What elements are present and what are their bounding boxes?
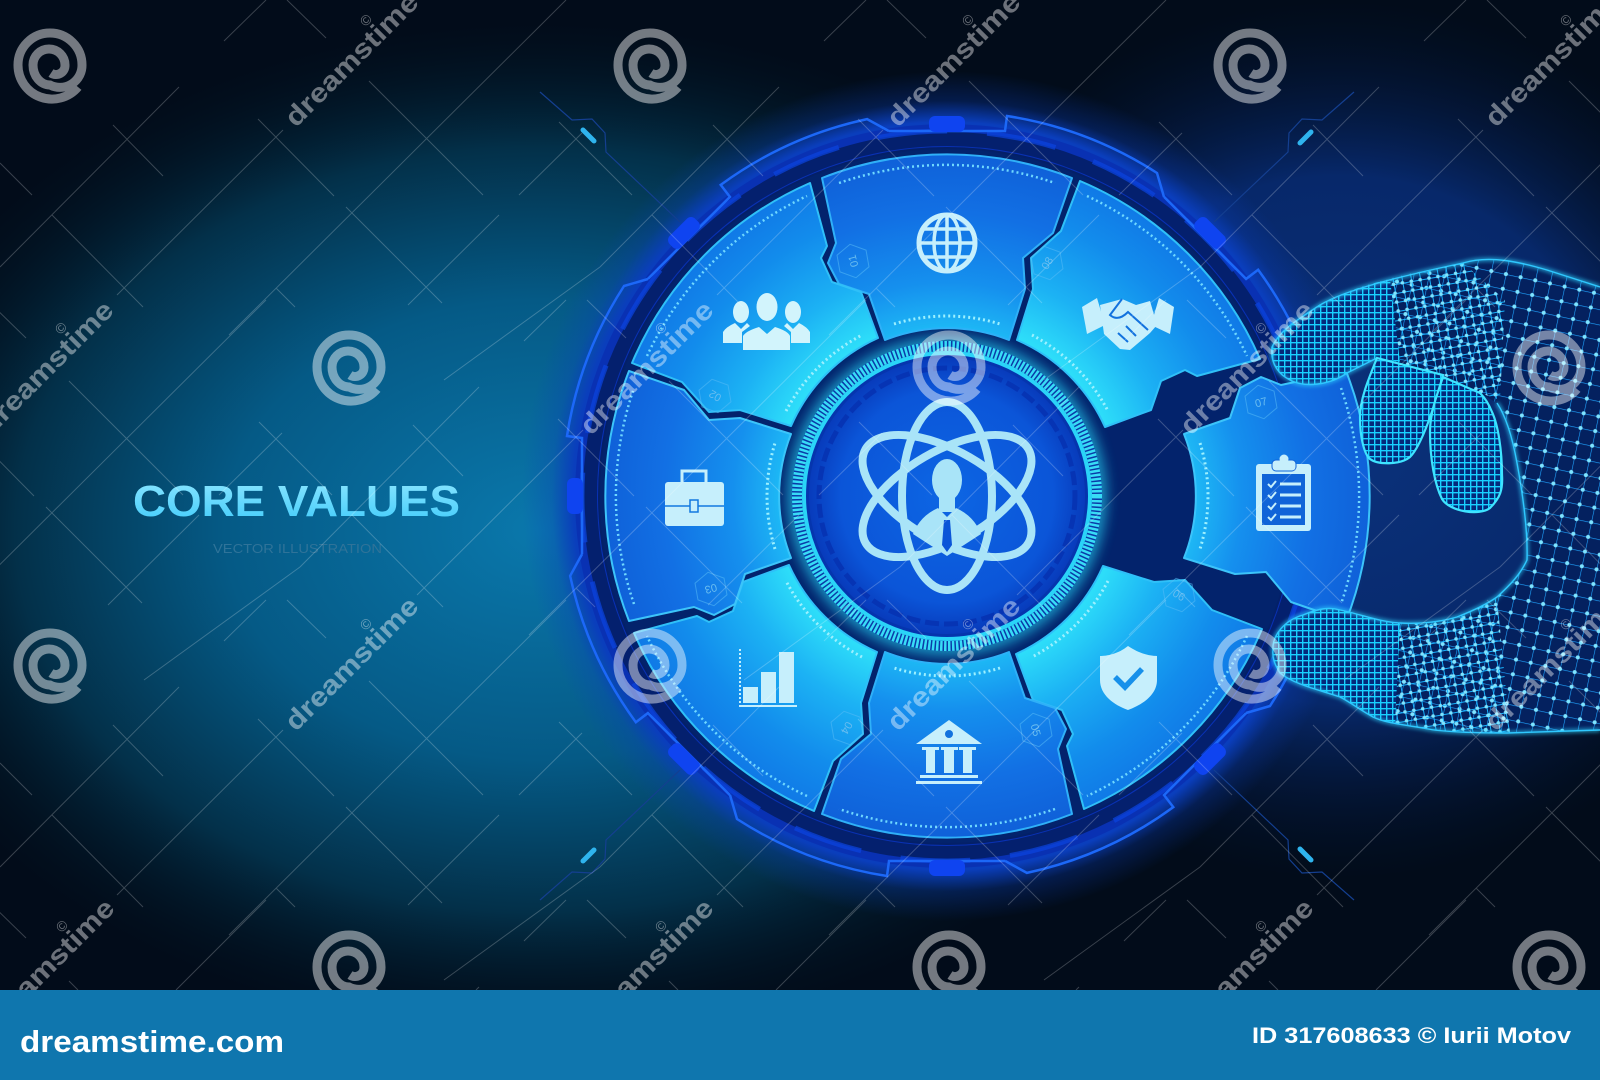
segment number tags: 08 xyxy=(1040,255,1056,272)
watermark wordmarks: © xyxy=(51,318,71,337)
icon: briefcase xyxy=(665,471,724,526)
icon: shield check xyxy=(1100,646,1157,710)
panel: top segment globe xyxy=(822,154,1072,340)
watermark wordmarks: © xyxy=(1251,916,1271,935)
watermark wordmarks: © xyxy=(356,10,376,29)
hand palm mesh xyxy=(1272,259,1600,733)
watermark wordmarks: © xyxy=(1556,614,1576,633)
wireframe hand xyxy=(1272,259,1600,733)
watermark wordmarks: dreamstime xyxy=(279,0,424,132)
panel: top right segment handshake xyxy=(1017,181,1260,427)
watermark wordmarks: dreamstime xyxy=(881,0,1026,132)
footer credit text: ID 317608633 © Iurii Motov xyxy=(1252,1023,1572,1048)
segment number tags xyxy=(690,241,1282,750)
watermark wordmarks: © xyxy=(1251,318,1271,337)
watermark wordmarks: dreamstime xyxy=(1174,893,1319,1038)
segment number tags: 02 xyxy=(707,387,724,403)
watermark wordmarks: dreamstime xyxy=(574,893,719,1038)
heading: core values: CORE VALUES xyxy=(133,477,460,526)
watermark wordmarks: © xyxy=(651,916,671,935)
circular wheel diagram xyxy=(525,74,1370,918)
panel: bottom left segment chart xyxy=(634,565,877,811)
watermark wordmarks: © xyxy=(356,614,376,633)
watermark wordmarks: © xyxy=(958,10,978,29)
watermark wordmarks: dreamstime xyxy=(881,591,1026,736)
center hub xyxy=(787,336,1107,656)
watermark wordmarks: © xyxy=(651,318,671,337)
hud corner markers xyxy=(540,92,1354,900)
panel: top left segment team xyxy=(632,183,878,426)
watermark wordmarks: © xyxy=(1556,10,1576,29)
segment number tags: 04 xyxy=(838,719,854,736)
watermark wordmarks: dreamstime xyxy=(574,295,719,440)
segment number tags: 03 xyxy=(703,581,718,595)
panel: bottom right segment shield xyxy=(1016,566,1262,809)
watermark wordmarks: © xyxy=(52,916,72,935)
icon: handshake xyxy=(1082,298,1174,350)
title block xyxy=(133,477,460,556)
subheading: vector illustration: VECTOR ILLUSTRATION xyxy=(213,542,382,556)
segment number tags: 07 xyxy=(1254,396,1269,410)
panel: bottom segment bank xyxy=(822,652,1072,838)
hand middle fingers xyxy=(1360,358,1502,512)
segment number tags: 05 xyxy=(1028,723,1042,738)
hand index finger and thumb mesh xyxy=(1272,259,1600,733)
panel: right segment clipboard pulled out xyxy=(1184,371,1370,621)
watermark wordmarks: © xyxy=(958,614,978,633)
panel: left segment briefcase xyxy=(605,371,791,621)
icon: clipboard checklist xyxy=(1256,454,1311,531)
footer bar xyxy=(0,990,1600,1080)
wheel outer gear ring xyxy=(525,74,1369,918)
icon: atom orbits xyxy=(843,402,1051,590)
segment number tags: 06 xyxy=(1170,588,1187,604)
segment number tags: 01 xyxy=(847,253,861,268)
icon: team of people xyxy=(723,293,810,350)
footer logo text: dreamstime.com xyxy=(20,1024,284,1059)
icon: business person xyxy=(913,459,981,556)
watermark wordmarks: dreamstime xyxy=(279,591,424,736)
icon: globe xyxy=(919,215,975,271)
icon: bank building xyxy=(916,720,982,784)
icon: bar chart xyxy=(739,649,797,707)
watermark wordmarks: dreamstime xyxy=(1174,295,1319,440)
